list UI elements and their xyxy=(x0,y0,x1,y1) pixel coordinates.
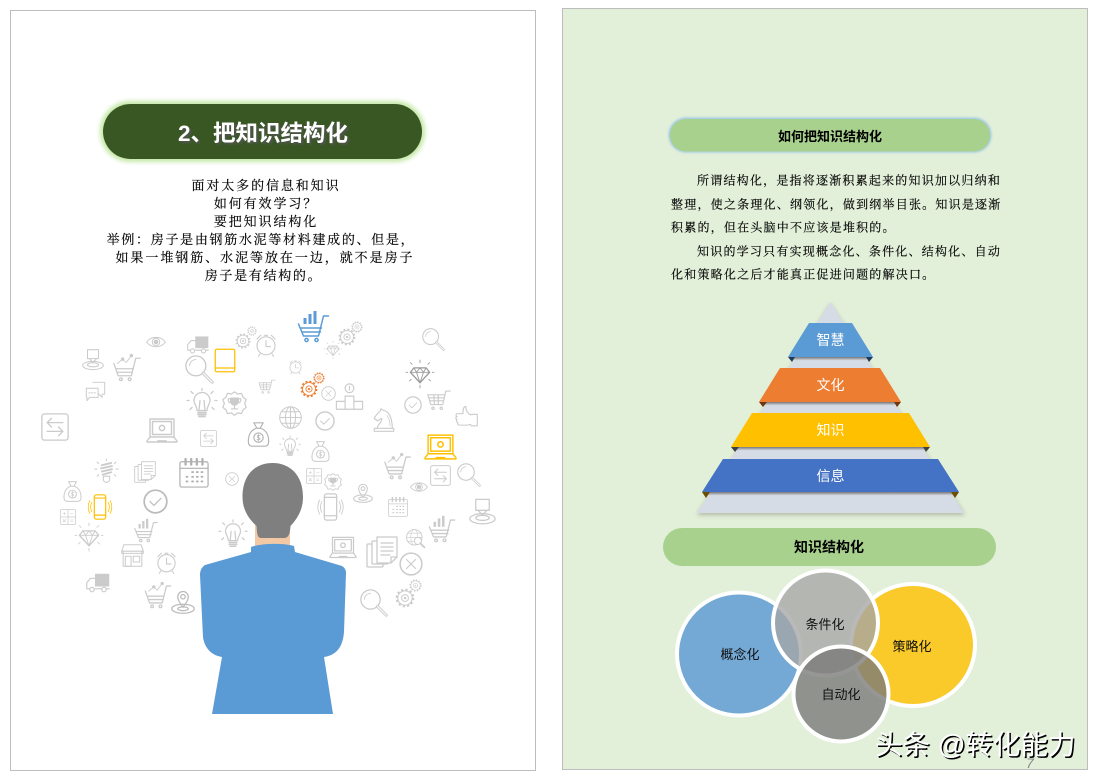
icon: eye xyxy=(147,337,165,347)
heading pill: 知识结构化 xyxy=(663,528,996,566)
illustration: person seen from behind xyxy=(200,463,346,714)
icon: spiral bulb xyxy=(95,459,118,482)
intro text block: 要把知识结构化 xyxy=(214,214,318,229)
icon: check circle xyxy=(144,490,167,513)
icon: globe magnifier xyxy=(407,530,424,547)
icon: cart with line chart xyxy=(145,583,171,608)
icon: cart with bars xyxy=(429,516,455,542)
icon: light bulb xyxy=(187,388,217,416)
icon: chat bubbles xyxy=(86,382,105,401)
icon: yellow laptop xyxy=(425,435,456,459)
icon: trophy badge xyxy=(223,392,246,415)
icon: shopping cart xyxy=(428,391,450,409)
icon: small clock xyxy=(290,361,301,374)
icon: magnifier xyxy=(361,590,386,615)
page number: 7 xyxy=(1026,755,1035,771)
icon: money bag small xyxy=(64,482,81,501)
icon: gears xyxy=(236,334,250,348)
icon: small diamond xyxy=(324,341,342,359)
circle: 概念化: 概念化 xyxy=(720,647,760,662)
shirt xyxy=(200,544,346,714)
icon: location pin xyxy=(354,484,372,502)
pyramid base triangle xyxy=(697,302,964,513)
icon: calculator xyxy=(60,510,76,524)
paragraph text block: 积累的，但在头脑中不应该是堆积的。 xyxy=(671,220,896,234)
paragraph text block xyxy=(671,172,1002,282)
pyramid chart xyxy=(697,302,965,515)
tier: 信息: 信息 xyxy=(816,468,844,484)
intro text block: 面对太多的信息和知识 xyxy=(191,178,341,193)
icon: yellow phone xyxy=(88,495,112,519)
icon: cart with line chart xyxy=(385,454,410,479)
watermark: 头条 @转化能力 xyxy=(875,729,1076,760)
icon: small orange gear xyxy=(314,373,324,383)
icon: podium xyxy=(336,384,363,409)
icon: calculator xyxy=(306,468,322,484)
icon: diamond xyxy=(75,523,103,551)
circle: 自动化: 自动化 xyxy=(821,687,861,702)
icon: small gear xyxy=(352,322,362,332)
icon: calendar xyxy=(180,459,208,487)
tier: 信息 xyxy=(702,459,959,498)
heading pill: 如何把知识结构化: 如何把知识结构化 xyxy=(778,129,882,144)
icon: monitor target xyxy=(83,350,103,370)
icon: dark diamond xyxy=(406,360,434,388)
icon: magnifier xyxy=(186,356,212,382)
icon: gear xyxy=(339,329,355,345)
icon: x circle xyxy=(226,473,238,485)
icon: money bag xyxy=(312,442,329,461)
circle: 策略化: 策略化 xyxy=(892,639,932,654)
intro text block xyxy=(107,178,415,283)
icon: clock xyxy=(158,553,175,573)
icon: chess knight xyxy=(374,409,394,431)
watermark: 头条 @转化能力 xyxy=(876,730,1077,762)
icon: x circle xyxy=(400,553,422,575)
paragraph text block: 化和策略化之后才能真正促进问题的解决口。 xyxy=(671,266,935,282)
tier: 文化 xyxy=(759,368,901,407)
panel: right page xyxy=(562,8,1088,771)
icon: clock xyxy=(257,335,275,356)
heading pill: 知识结构化: 知识结构化 xyxy=(794,539,864,555)
tier: 智慧: 智慧 xyxy=(816,332,844,348)
icon: check circle xyxy=(316,412,334,430)
icon: phone xyxy=(318,494,343,520)
circle: 概念化 xyxy=(677,592,801,716)
icon: gear xyxy=(397,590,413,606)
icon: yellow tablet xyxy=(215,349,235,372)
icon cloud xyxy=(42,311,495,615)
icon: money bag xyxy=(248,423,269,446)
venn diagram xyxy=(677,570,975,742)
icon: small swap box xyxy=(201,431,216,446)
circle: 策略化 xyxy=(851,584,975,706)
icon: large swap box xyxy=(42,414,68,440)
icon: check circle xyxy=(405,397,421,413)
icon: truck xyxy=(87,574,109,592)
icon: magnifier xyxy=(458,464,480,486)
icon: calendar xyxy=(389,498,407,516)
tier: 知识: 知识 xyxy=(816,422,844,438)
icon: shop xyxy=(122,545,143,566)
icon: documents xyxy=(367,537,397,567)
icon: eye xyxy=(411,483,427,491)
circle: 条件化 xyxy=(773,570,878,676)
icon: thumbs up xyxy=(456,406,477,426)
icon: cart with line chart xyxy=(114,355,140,381)
icon: trophy badge xyxy=(325,474,341,490)
paragraph text block: 知识的学习只有实现概念化、条件化、结构化、自动 xyxy=(697,244,1001,258)
tier: 知识 xyxy=(731,413,930,452)
icon: swap box xyxy=(431,466,450,485)
icon: orange gear xyxy=(301,381,317,397)
icon: magnifier xyxy=(423,329,444,350)
panel: left page xyxy=(10,10,536,770)
head xyxy=(242,463,303,538)
icon: light bulb xyxy=(280,436,300,455)
icon: monitor target xyxy=(470,499,495,524)
intro text block: 如果一堆钢筋、水泥等放在一边，就不是房子 xyxy=(115,250,415,266)
tier: 文化: 文化 xyxy=(816,377,844,393)
neck xyxy=(255,525,290,550)
title pill: 2、把知识结构化: 2、把知识结构化 xyxy=(178,121,348,146)
circle: 自动化 xyxy=(794,646,888,742)
icon: blue cart xyxy=(298,311,328,342)
icon: x circle xyxy=(322,387,335,400)
heading pill: 如何把知识结构化 xyxy=(668,118,992,152)
paragraph text block: 所谓结构化，是指将逐渐积累起来的知识加以归纳和 xyxy=(697,172,1001,188)
tier: 智慧 xyxy=(788,323,873,362)
title pill: 2、把知识结构化: 2、把知识结构化 xyxy=(180,123,350,148)
icon: small cart xyxy=(259,380,275,393)
icon: light bulb xyxy=(219,520,247,546)
intro text block: 举例：房子是由钢筋水泥等材料建成的、但是， xyxy=(107,232,415,248)
icon: truck xyxy=(188,336,208,353)
icon: location pin xyxy=(172,592,194,613)
intro text block: 房子是有结构的。 xyxy=(205,268,322,283)
icon: small gear xyxy=(410,580,421,591)
intro text block: 如何有效学习？ xyxy=(214,196,318,211)
icon: small gear xyxy=(248,327,256,335)
icon: laptop xyxy=(147,419,177,442)
paragraph text block: 整理，使之条理化、纲领化，做到纲举目张。知识是逐渐 xyxy=(671,196,1002,212)
icon: laptop xyxy=(330,537,356,558)
icon: documents xyxy=(135,462,155,482)
title pill: 2、把知识结构化 xyxy=(100,101,425,162)
circle: 条件化: 条件化 xyxy=(805,617,845,632)
icon: globe xyxy=(280,407,301,428)
icon: cart with bars xyxy=(135,519,157,542)
